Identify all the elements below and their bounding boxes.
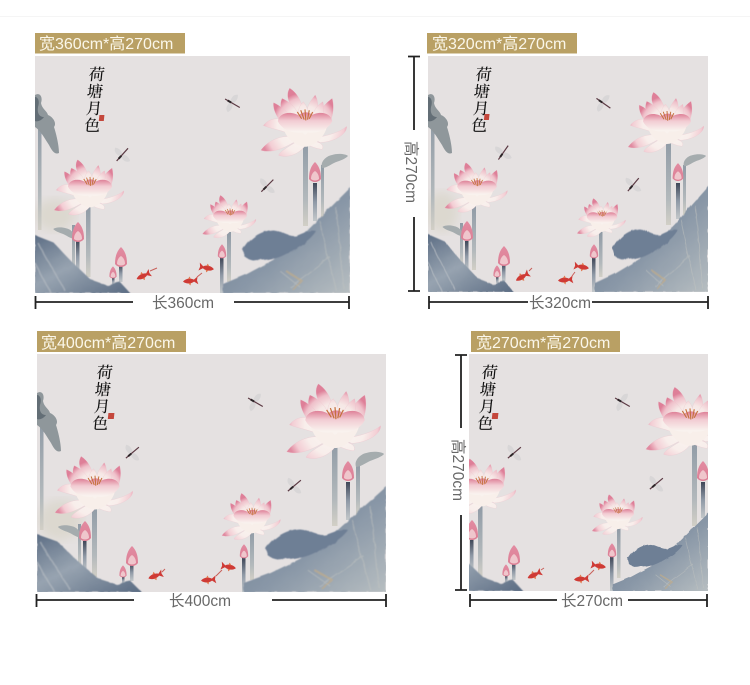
height dimension: 320cm panel xyxy=(402,56,420,291)
mural: 360cm xyxy=(35,56,350,293)
width dimension: 320cm xyxy=(429,294,708,312)
size label: 270cm: 宽270cm*高270cm xyxy=(476,334,610,352)
calligraphy title: 月 xyxy=(85,100,103,118)
height dimension: 320cm panel: 高270cm xyxy=(402,141,420,203)
calligraphy title xyxy=(472,66,492,132)
width dimension: 360cm: 长360cm xyxy=(152,294,214,312)
calligraphy title: 月 xyxy=(472,100,490,118)
height dimension: 270cm panel xyxy=(449,355,467,590)
width dimension: 400cm xyxy=(36,592,386,610)
width dimension: 270cm xyxy=(470,592,707,610)
calligraphy title: 色 xyxy=(476,415,494,433)
size label: 320cm: 宽320cm*高270cm xyxy=(432,35,566,53)
calligraphy title: 色 xyxy=(91,415,109,433)
height dimension: 270cm panel: 高270cm xyxy=(449,439,467,501)
width dimension: 360cm xyxy=(35,294,349,312)
panel: 360cm wall preview xyxy=(35,33,350,312)
calligraphy title: 荷 xyxy=(96,363,114,382)
width dimension: 270cm: 长270cm xyxy=(561,592,623,610)
panel: 320cm wall preview xyxy=(402,33,708,312)
width dimension: 320cm: 长320cm xyxy=(529,294,591,312)
calligraphy title: 塘 xyxy=(473,83,491,101)
calligraphy title xyxy=(93,364,114,430)
calligraphy title: 荷 xyxy=(88,65,106,84)
mural: 270cm xyxy=(469,354,708,591)
size label: 400cm: 宽400cm*高270cm xyxy=(41,334,175,352)
calligraphy title: 塘 xyxy=(86,83,104,101)
calligraphy title: 色 xyxy=(470,117,488,135)
calligraphy title: 荷 xyxy=(475,65,493,84)
calligraphy title: 荷 xyxy=(481,363,499,382)
calligraphy title: 月 xyxy=(93,398,111,416)
calligraphy title: 色 xyxy=(83,117,101,135)
mural: 320cm xyxy=(426,56,708,292)
calligraphy title: 塘 xyxy=(479,381,497,399)
panel: 400cm wall preview xyxy=(36,331,386,610)
calligraphy title: 塘 xyxy=(94,381,112,399)
calligraphy title: 月 xyxy=(478,398,496,416)
calligraphy title xyxy=(478,364,498,430)
mural: 400cm xyxy=(37,354,386,592)
size label: 360cm: 宽360cm*高270cm xyxy=(39,35,173,53)
width dimension: 400cm: 长400cm xyxy=(169,592,231,610)
panel: 270cm wall preview xyxy=(451,331,708,608)
calligraphy title xyxy=(85,66,105,132)
